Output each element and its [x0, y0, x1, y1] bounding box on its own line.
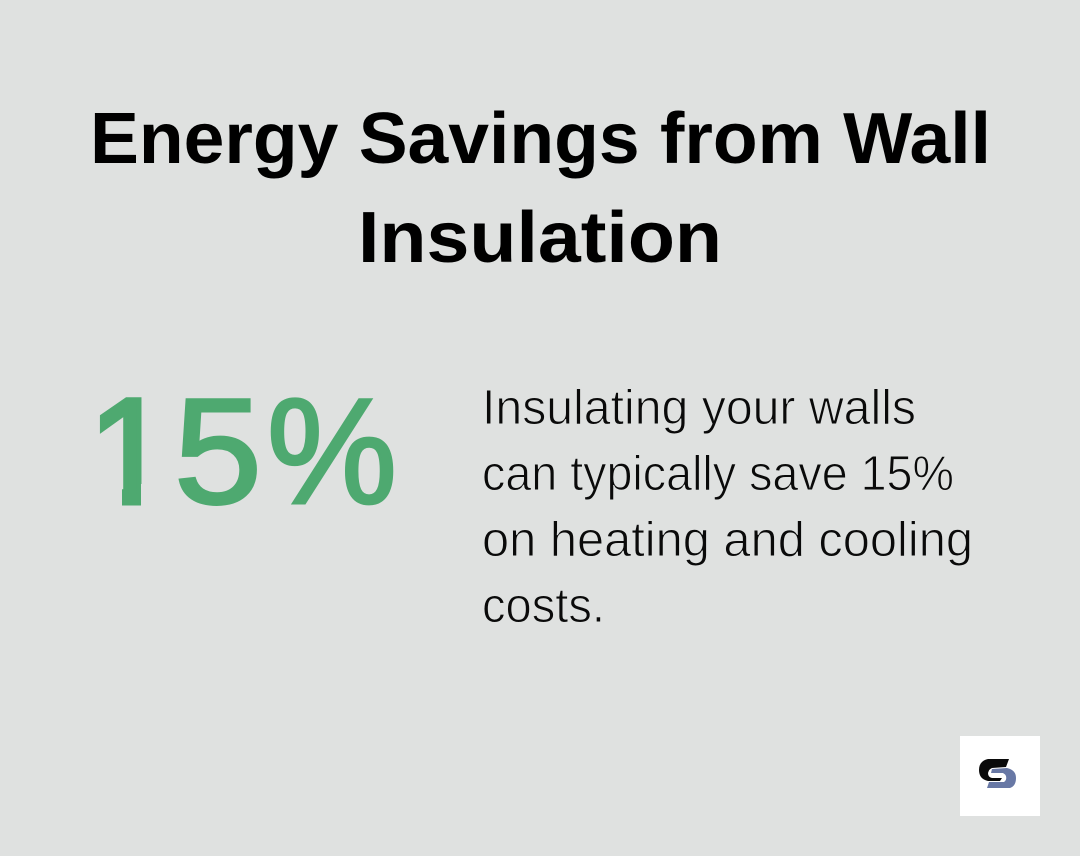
description text [482, 381, 973, 633]
title: Energy Savings from Wall [90, 99, 991, 179]
description text: on heating and cooling [482, 513, 973, 567]
big statistic: 15% [100, 397, 394, 506]
title: Insulation [358, 198, 722, 278]
description text: Insulating your walls [482, 381, 916, 435]
icon: logo lower shape [987, 768, 1016, 788]
big statistic: 15%: 5 [174, 367, 262, 535]
description text: costs. [482, 579, 605, 633]
description text: can typically save 15% [482, 447, 954, 501]
title [90, 99, 991, 278]
big statistic: 15%: 1 [88, 367, 171, 535]
logo badge [960, 736, 1040, 816]
icon: logo upper shape [979, 759, 1009, 781]
big statistic: 15%: % [267, 367, 397, 535]
infographic canvas [94, 110, 1040, 816]
